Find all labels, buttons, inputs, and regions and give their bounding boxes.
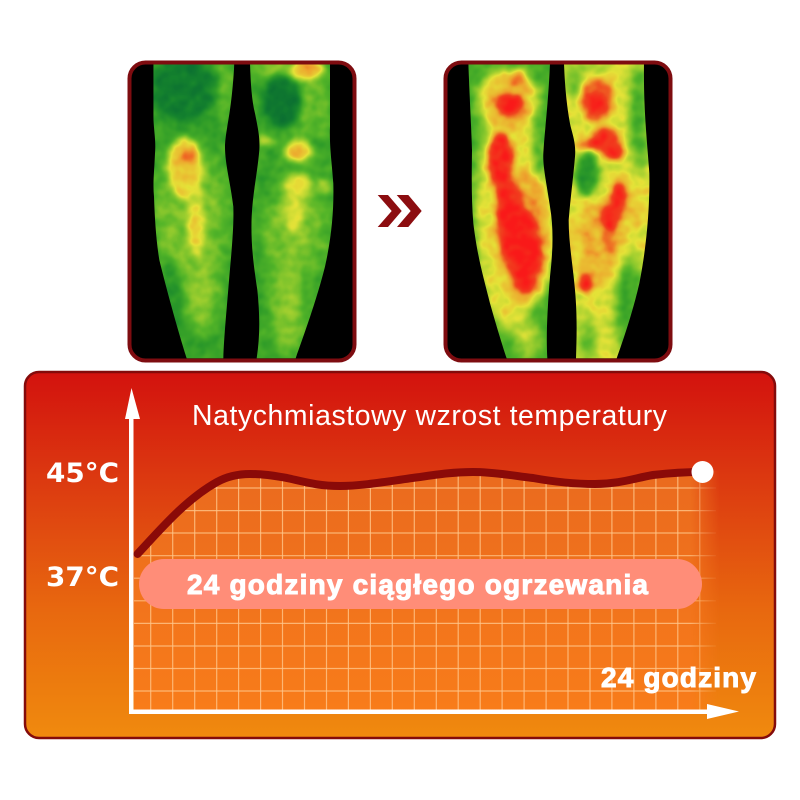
left leg after [468,64,552,358]
icon: double chevron arrow [378,195,422,227]
pill: continuous heating label: 24 godziny ciągłego ogrzewania [187,569,648,600]
y label 45°C: 45°C [46,458,119,489]
chart title: Natychmiastowy wzrost temperatury [192,400,668,432]
panel: temperature chart [25,372,775,738]
panel: before thermal image [130,53,354,367]
x axis arrow [129,704,739,719]
y axis arrow [125,388,140,714]
panel: after thermal image [446,57,670,367]
temperature curve [138,472,702,554]
pill: continuous heating label [139,559,702,609]
left leg before [153,64,234,358]
x axis label: 24 godziny [601,662,756,693]
right leg before [250,64,334,358]
curve end marker [692,461,714,483]
y label 37°C: 37°C [46,562,119,593]
right leg after [564,64,650,358]
